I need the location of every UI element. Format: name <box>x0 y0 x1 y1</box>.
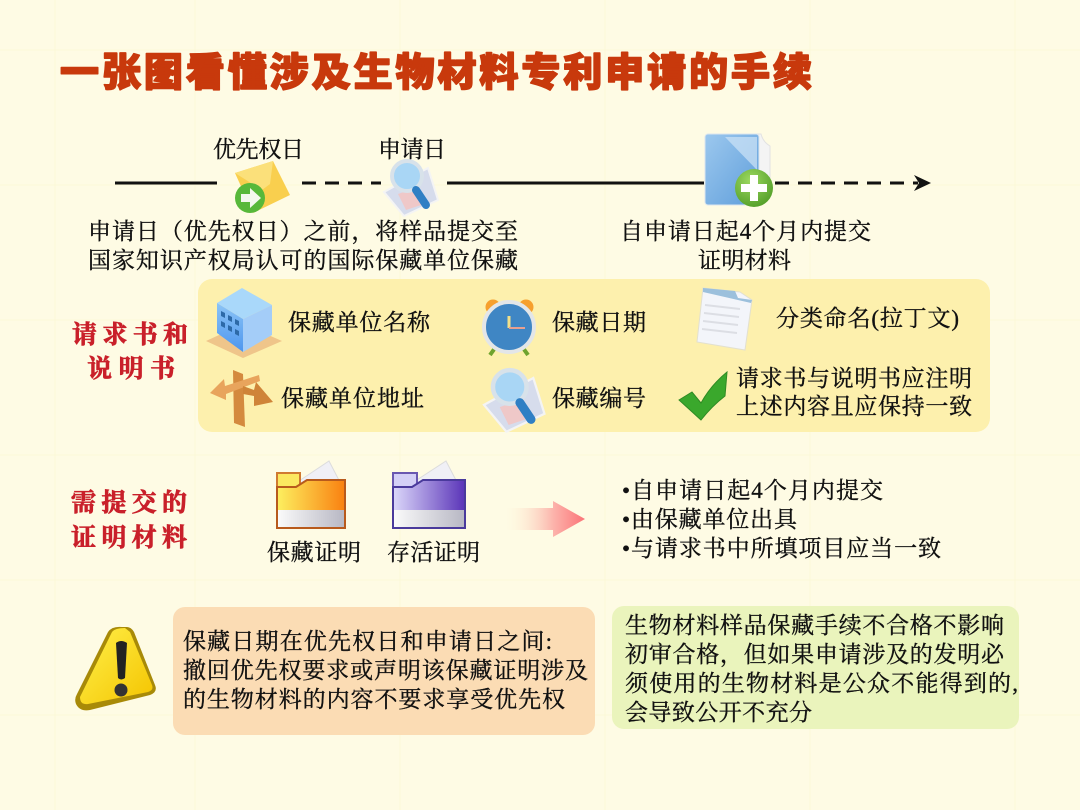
timeline <box>88 134 931 273</box>
text: orange note body <box>183 629 588 712</box>
text: taxonomic name: 分类命名(拉丁文) <box>776 306 959 331</box>
icon: alarm clock <box>484 300 534 355</box>
icon: magnifier on map <box>484 370 544 432</box>
icon: purple folder <box>393 461 465 528</box>
text: within four months: 自申请日起4个月内提交 <box>620 219 871 244</box>
text: depositary name: 保藏单位名称 <box>288 310 431 335</box>
label: priority date: 优先权日 <box>213 137 304 162</box>
label: filing date: 申请日 <box>378 137 446 162</box>
text: before filing date: 申请日（优先权日）之前，将样品提交至 <box>88 219 518 245</box>
icon: orange folder <box>277 461 345 528</box>
text: deposit certificate: 保藏证明 <box>267 540 361 565</box>
text: certificate requirements <box>622 478 941 561</box>
text: certificate requirements: •由保藏单位出具 <box>622 507 798 532</box>
text: deposit date: 保藏日期 <box>552 310 646 335</box>
icon: document <box>697 288 752 350</box>
heading: claims and description: 请求书和 <box>72 321 188 349</box>
heading: claims and description <box>72 321 188 383</box>
icon: building <box>206 288 282 358</box>
panel: green note <box>612 606 1019 729</box>
timeline line: priority segment <box>115 182 217 184</box>
text: certificate requirements: •自申请日起4个月内提交 <box>622 478 883 503</box>
text: within four months: 证明材料 <box>698 248 791 273</box>
heading: claims and description: 说明书 <box>87 355 176 383</box>
icon: signpost <box>210 370 273 427</box>
icon: warning triangle <box>75 627 156 710</box>
heading: certificates to submit <box>71 489 187 552</box>
icon: check mark <box>679 372 727 420</box>
icon: blue folder with plus <box>705 134 773 207</box>
timeline line: filing segment <box>447 182 704 184</box>
heading: certificates to submit: 需提交的 <box>71 489 187 517</box>
panel: required content <box>198 279 990 432</box>
timeline dashed arrow <box>775 175 931 191</box>
timeline dashed segment <box>302 182 381 184</box>
text: deposit number: 保藏编号 <box>552 386 646 411</box>
icon: envelope <box>235 161 290 213</box>
text: orange note body: 的生物材料的内容不要求享受优先权 <box>183 687 565 712</box>
text: before filing date <box>88 219 518 273</box>
arrow: gradient <box>505 501 585 537</box>
icon: magnifier on map <box>384 161 438 216</box>
panel: orange note <box>173 607 595 735</box>
text: consistency note: 上述内容且应保持一致 <box>736 394 972 419</box>
text: orange note body: 撤回优先权要求或声明该保藏证明涉及 <box>183 658 588 683</box>
text: depositary address: 保藏单位地址 <box>281 386 424 411</box>
heading: certificates to submit: 证明材料 <box>71 524 187 552</box>
title: 一张图看懂涉及生物材料专利申请的手续 <box>60 52 812 95</box>
text: green note body: 会导致公开不充分 <box>625 700 812 725</box>
text: green note body: 生物材料样品保藏手续不合格不影响 <box>625 613 1004 638</box>
text: consistency note: 请求书与说明书应注明 <box>736 366 972 391</box>
text: viability certificate: 存活证明 <box>387 540 480 565</box>
text: certificate requirements: •与请求书中所填项目应当一致 <box>622 536 941 561</box>
text: consistency note <box>736 366 972 419</box>
text: green note body: 初审合格，但如果申请涉及的发明必 <box>625 642 1005 668</box>
text: green note body: 须使用的生物材料是公众不能得到的, <box>625 671 1018 696</box>
text: green note body <box>625 613 1018 725</box>
text: orange note body: 保藏日期在优先权日和申请日之间: <box>183 629 552 654</box>
text: before filing date: 国家知识产权局认可的国际保藏单位保藏 <box>88 248 518 273</box>
text: within four months <box>620 219 871 273</box>
